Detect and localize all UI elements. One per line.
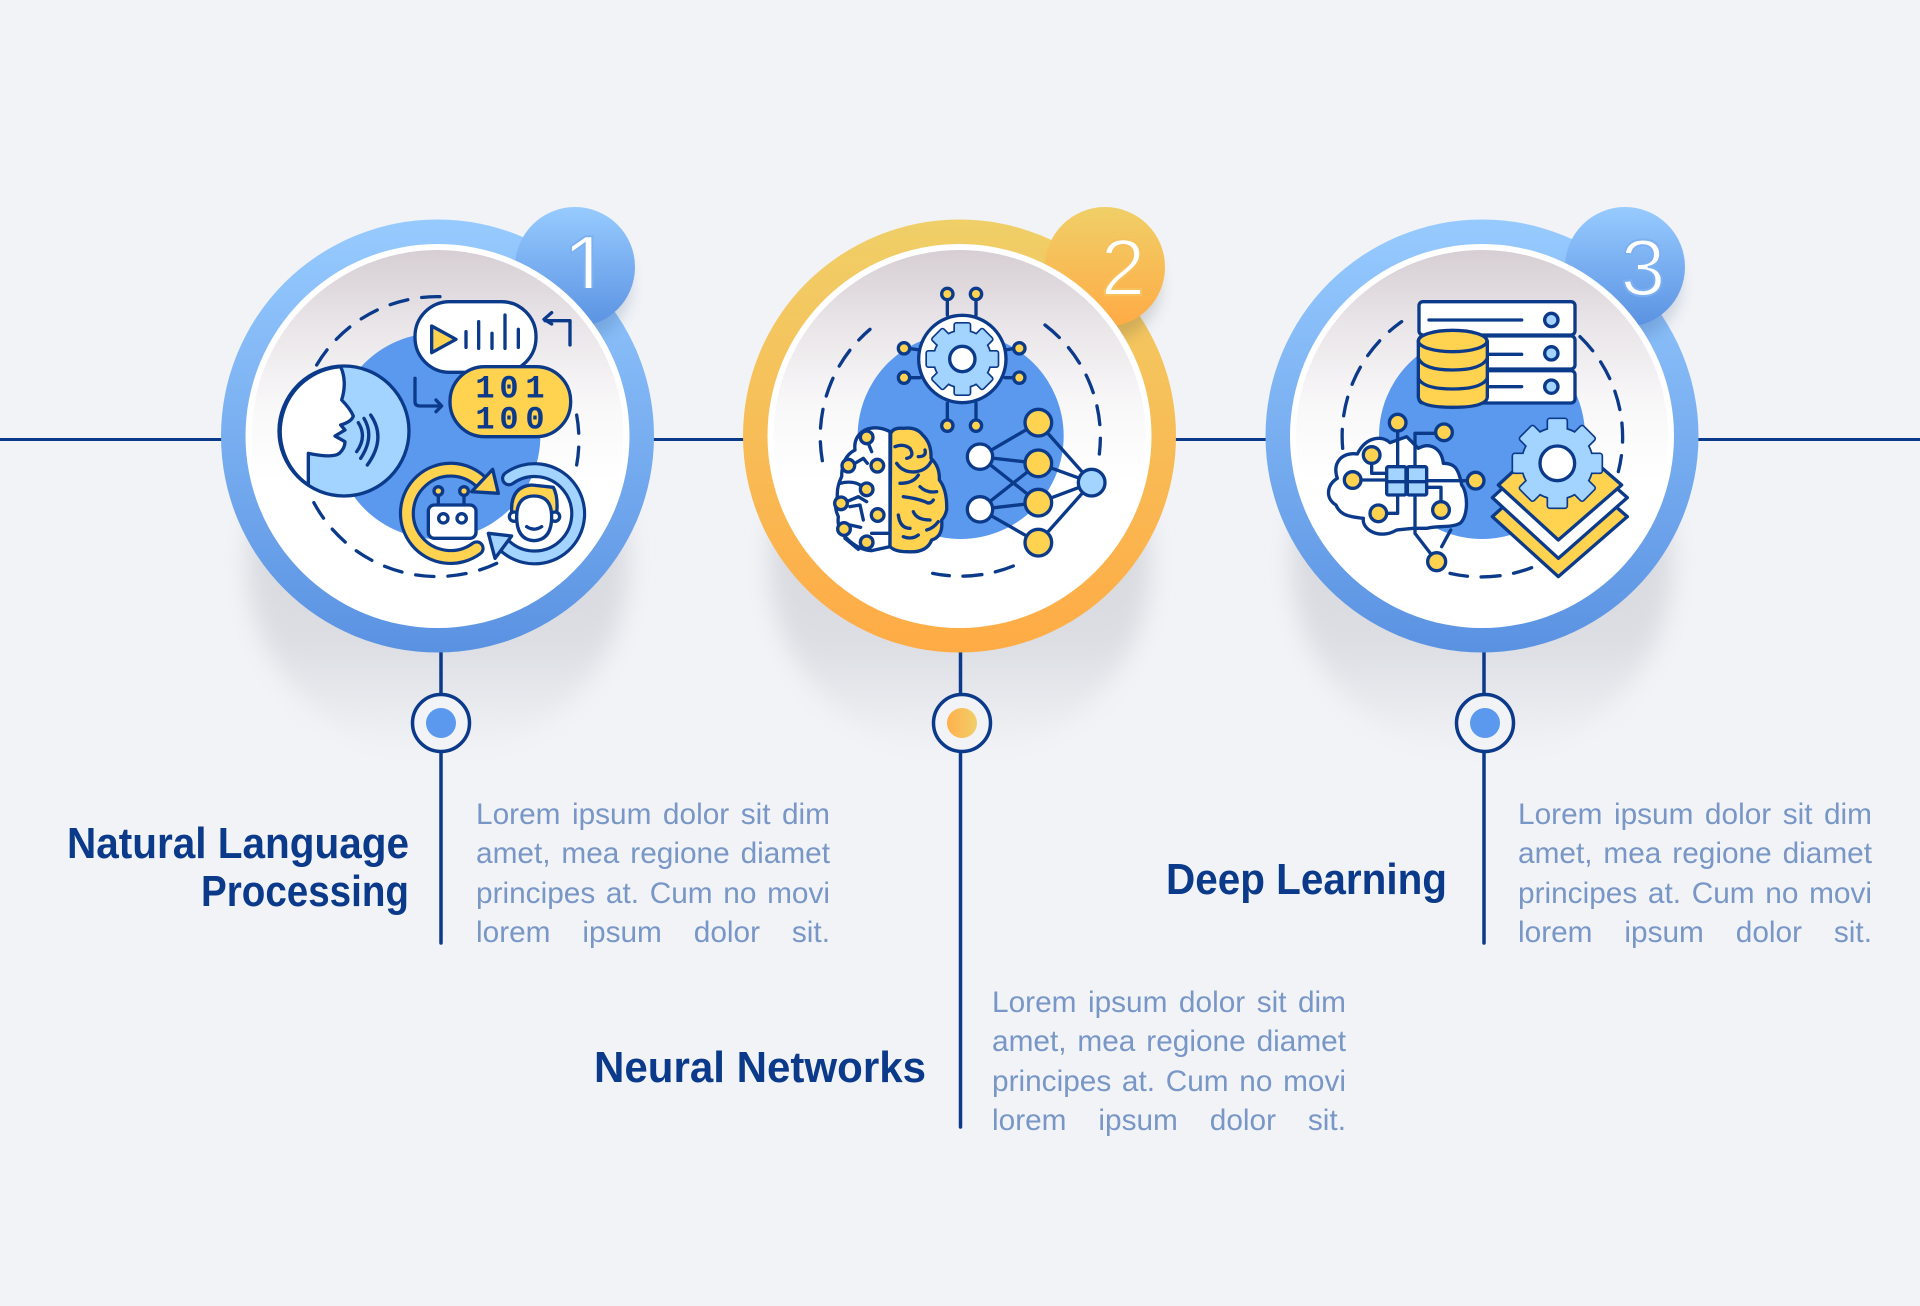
text block: step 2 description: principes at. Cum no movi <box>992 1065 1346 1098</box>
outer ring 2 <box>743 220 1176 652</box>
icon: binary bubble <box>450 367 571 438</box>
icon: binary bubble: 100 <box>475 401 545 438</box>
text block: step 3 description: Lorem ipsum dolor sit dim <box>1518 798 1872 831</box>
number badge 3 <box>1565 207 1685 341</box>
text block: step 3 description: principes at. Cum no movi <box>1518 877 1872 910</box>
connector line 2 <box>959 650 962 1127</box>
drop shadow 3 <box>1292 375 1672 755</box>
icon: large gear <box>1513 419 1601 507</box>
outer ring 1 <box>221 220 654 652</box>
horizontal timeline line <box>0 438 1920 441</box>
node marker 1 <box>412 694 470 752</box>
connector line 3 <box>1482 650 1486 943</box>
arrow: back to audio <box>544 313 570 345</box>
text block: step 3 description: lorem ipsum dolor sit. <box>1518 916 1872 949</box>
node marker 3 <box>1456 694 1514 752</box>
node marker 2 <box>934 694 990 752</box>
drop shadow 1 <box>248 375 628 755</box>
text block: step 2 description <box>992 986 1346 1137</box>
icon: circuit brain <box>1329 414 1484 571</box>
inner white disc 3 <box>1290 244 1674 628</box>
number badge 1 <box>515 207 635 341</box>
icon: audio bubble <box>415 302 536 372</box>
icon: gear circuit <box>898 288 1025 431</box>
panel: step 3 circle <box>1266 207 1698 943</box>
text block: step 1 description: principes at. Cum no movi <box>476 877 830 910</box>
number badge 2: 2 <box>1101 223 1145 312</box>
text block: step 1 description <box>476 798 830 949</box>
text block: step 1 description: Lorem ipsum dolor sit dim <box>476 798 830 831</box>
text block: step 2 description: lorem ipsum dolor sit. <box>992 1104 1346 1137</box>
icon: server rack <box>1419 302 1575 403</box>
icon: speech to code and chatbot <box>279 297 579 577</box>
number badge 2 <box>1045 207 1165 341</box>
inner white disc 1 <box>246 244 630 628</box>
text block: step 2 description: Lorem ipsum dolor sit dim <box>992 986 1346 1019</box>
number badge 3: 3 <box>1621 223 1665 312</box>
number badge 1: 1 <box>563 217 611 316</box>
drop shadow 2 <box>770 375 1150 755</box>
icon: blue cycle arrow <box>488 470 578 558</box>
text block: step 3 description: amet, mea regione diamet <box>1518 837 1872 870</box>
heading: Neural Networks: Neural Networks <box>594 1043 926 1092</box>
icon: talking face <box>279 366 409 496</box>
inner white disc 2 <box>768 244 1152 628</box>
icon: stacked layers <box>1492 430 1627 577</box>
text block: step 2 description: amet, mea regione diamet <box>992 1025 1346 1058</box>
panel: step 2 circle <box>743 207 1176 1127</box>
heading: Natural Language Processing: Processing <box>201 867 409 916</box>
icon: binary bubble: 101 <box>475 370 545 407</box>
icon: person <box>509 485 560 541</box>
icon: yellow cycle arrow <box>407 469 498 557</box>
text block: step 3 description <box>1518 798 1872 949</box>
icon: robot <box>428 487 476 538</box>
heading: Deep Learning: Deep Learning <box>1166 855 1447 904</box>
heading: Natural Language Processing <box>67 819 409 916</box>
panel: step 1 circle <box>221 207 654 943</box>
connector line 1 <box>439 650 443 943</box>
icon: neural networks <box>820 288 1105 576</box>
outer ring 3 <box>1266 220 1698 652</box>
arrow: to binary <box>415 378 442 412</box>
heading: Natural Language Processing: Natural Language <box>67 819 409 868</box>
icon: database cylinder <box>1418 330 1487 407</box>
text block: step 1 description: amet, mea regione diamet <box>476 837 830 870</box>
icon: deep learning <box>1329 302 1627 577</box>
icon: node network <box>967 409 1105 556</box>
icon: half circuit half organic brain <box>835 428 947 552</box>
text block: step 1 description: lorem ipsum dolor sit. <box>476 916 830 949</box>
